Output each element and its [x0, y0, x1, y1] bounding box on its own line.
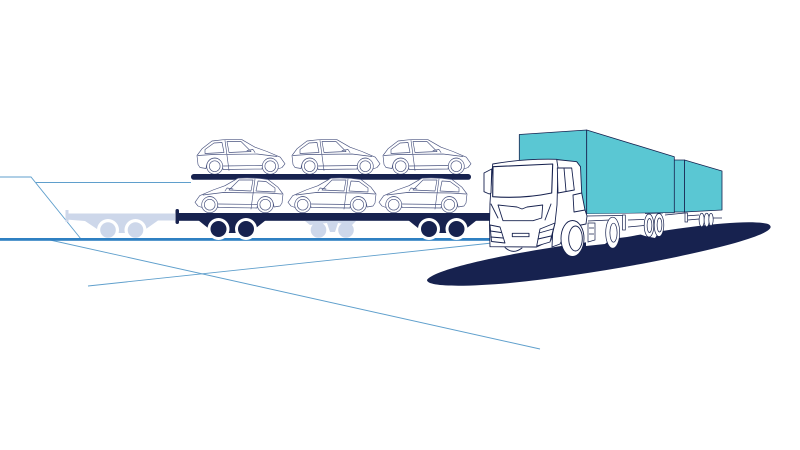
thin perspective lines: [0, 177, 540, 349]
road line: [0, 238, 492, 241]
rear trailer box: [674, 160, 722, 212]
trailer chassis: [176, 209, 492, 240]
rear trailer chassis: [665, 212, 722, 227]
ghost wheels middle: [305, 221, 356, 238]
truck cab: [484, 159, 587, 256]
shadow: [427, 222, 771, 286]
cab side: [552, 160, 587, 247]
mirror: [484, 169, 492, 194]
cab front: [490, 159, 558, 247]
windscreen: [493, 164, 553, 197]
front wheel: [561, 220, 584, 256]
side vents: [491, 204, 551, 220]
side window: [557, 168, 574, 193]
cars upper row: [197, 139, 471, 174]
grille: [498, 205, 543, 221]
cars lower row: [195, 178, 467, 213]
truck chassis and rear wheels: [586, 213, 665, 248]
headlamp right: [537, 223, 555, 246]
logo strip: [512, 233, 529, 237]
ghost trailer left: [66, 210, 175, 241]
upper deck: [191, 174, 471, 180]
under-bumper tyre: [505, 248, 522, 251]
main cargo box: [519, 130, 674, 214]
headlamp left: [490, 225, 505, 243]
